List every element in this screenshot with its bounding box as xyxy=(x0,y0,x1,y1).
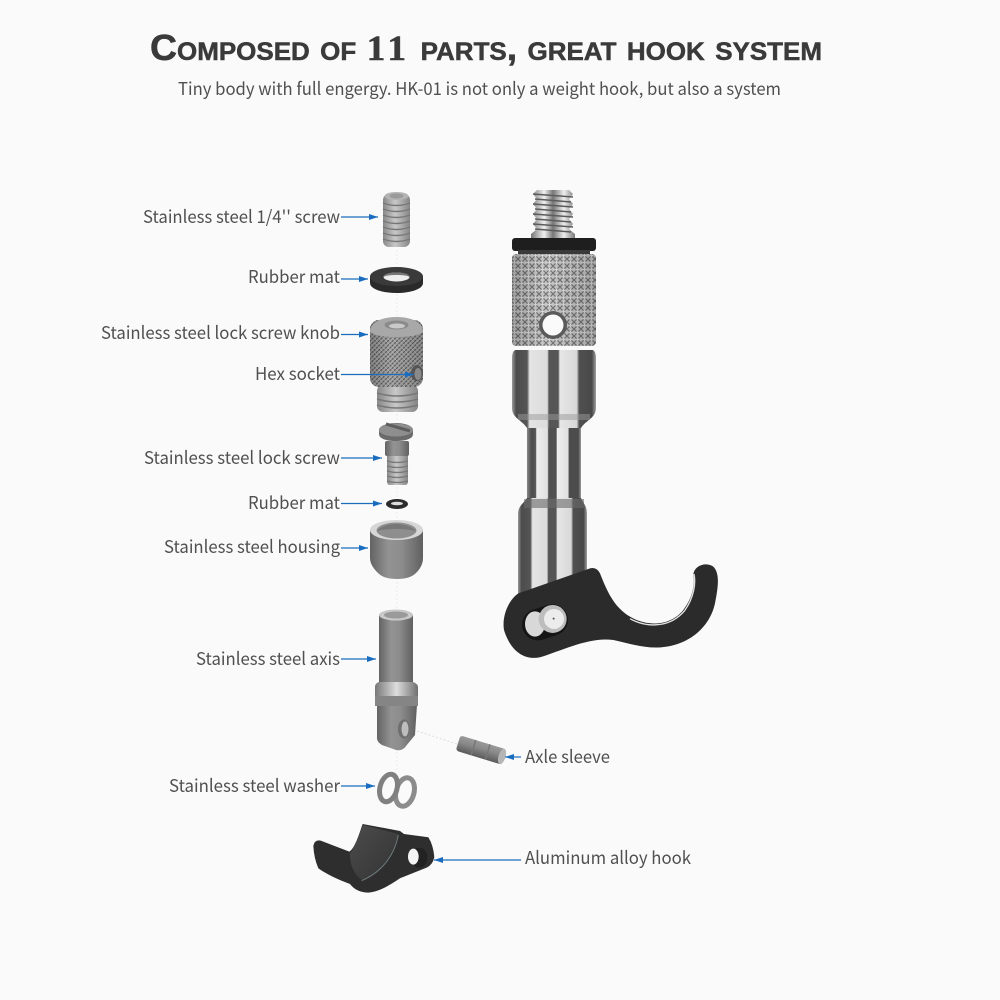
lower body xyxy=(518,498,587,600)
part: small rubber mat xyxy=(386,499,408,509)
part: aluminum alloy hook xyxy=(313,824,434,893)
part: lock screw xyxy=(379,423,413,485)
neck xyxy=(527,428,581,500)
part: rubber mat xyxy=(370,267,423,293)
black hook plate xyxy=(504,564,718,658)
label: lock screw knob: Stainless steel lock screw knob xyxy=(101,320,340,345)
label: lock screw: Stainless steel lock screw xyxy=(144,445,340,470)
label: axle sleeve: Axle sleeve xyxy=(525,744,610,769)
knurled knob xyxy=(512,254,596,346)
part: lock screw knob xyxy=(370,317,423,412)
part: stainless steel 1/4 screw xyxy=(383,192,410,247)
subtitle: Tiny body with full engergy. HK-01 is not only a weight hook, but also a system xyxy=(178,76,781,101)
label: small rubber mat: Rubber mat xyxy=(248,490,340,515)
label: hex socket: Hex socket xyxy=(255,361,340,386)
part: stainless steel axis xyxy=(375,610,418,750)
label: housing: Stainless steel housing xyxy=(164,534,340,559)
part: assembled hook tool xyxy=(504,190,718,658)
label: stainless steel 1/4 screw: Stainless steel 1/4'' screw xyxy=(143,204,340,229)
thread of assembled tool xyxy=(531,190,575,238)
assembly guide line xyxy=(396,250,398,770)
label: axis: Stainless steel axis xyxy=(196,646,340,671)
faint link between axis and sleeve xyxy=(417,731,457,744)
title: Composed of 11 parts, great hook system xyxy=(150,27,822,68)
part: axle sleeve xyxy=(456,735,508,765)
label: rubber mat: Rubber mat xyxy=(248,264,340,289)
label: aluminum alloy hook: Aluminum alloy hook xyxy=(525,845,691,870)
upper body xyxy=(512,350,596,428)
black flange xyxy=(512,238,596,251)
label: washer: Stainless steel washer xyxy=(169,773,340,798)
part: housing xyxy=(370,520,423,579)
part: stainless steel washers xyxy=(377,772,417,808)
